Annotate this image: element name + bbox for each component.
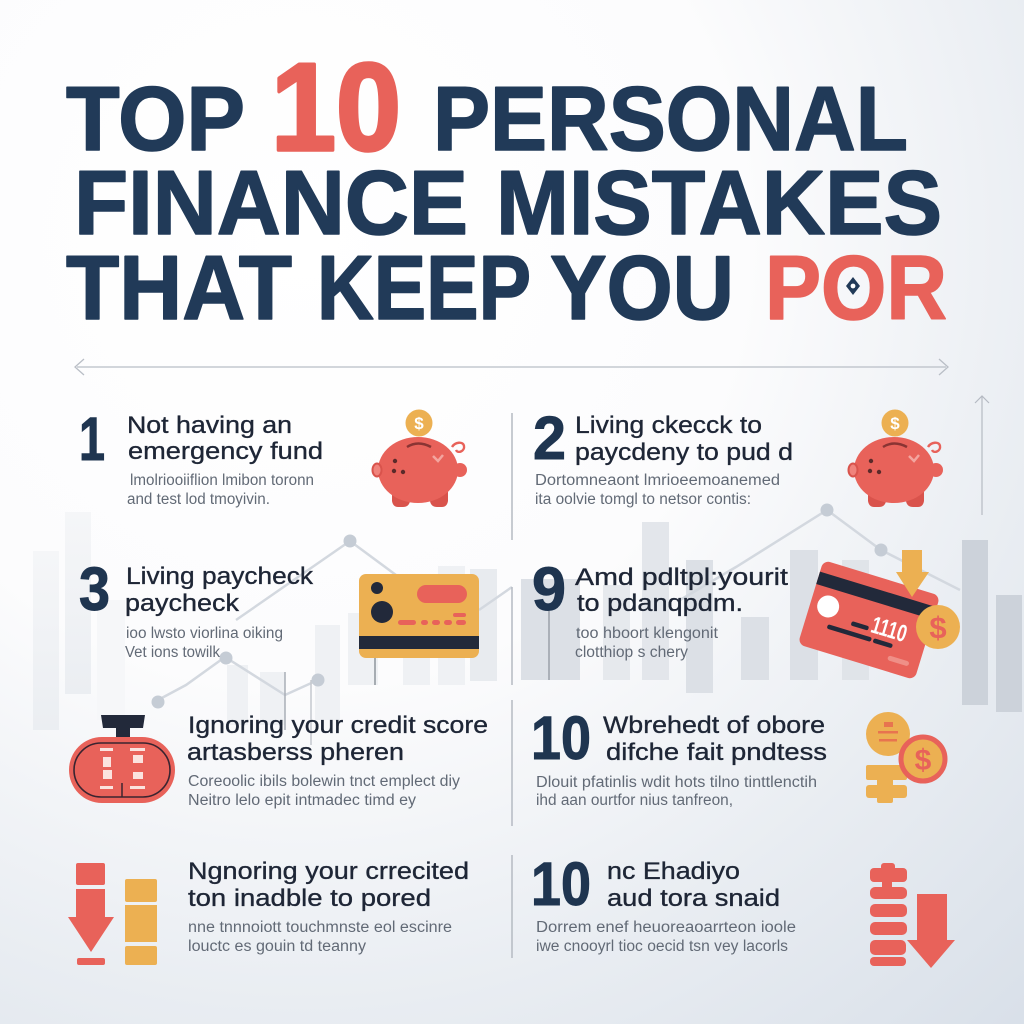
icon: down arrow and yellow stack xyxy=(68,863,157,965)
item 5: Ignoring your credit score xyxy=(188,712,488,739)
title: YOU xyxy=(550,238,734,339)
item 10b xyxy=(531,850,796,955)
item 10a: 10 xyxy=(531,704,591,772)
item 10b: 10 xyxy=(531,850,591,918)
title: KEEP xyxy=(317,238,531,339)
item 7: nne tnnnoiott touchmnste eol escinre xyxy=(188,919,452,936)
item 3: paycheck xyxy=(125,590,240,617)
item 10a: difche fait pndtess xyxy=(606,739,827,766)
item 10b: iwe cnooyrl tioc oecid tsn vey lacorls xyxy=(536,938,788,955)
title: MISTAKES xyxy=(496,153,942,254)
item 3: Living paycheck xyxy=(126,563,314,590)
title xyxy=(66,39,947,339)
item 10b: Dorrem enef heuoreaoarrteon ioole xyxy=(536,919,796,936)
background chart: bars and trend lines xyxy=(33,504,1022,745)
icon: coins and yellow stack: $ xyxy=(915,744,932,777)
item 7: Ngnoring your crrecited xyxy=(188,858,469,885)
icon: piggy bank 2 xyxy=(848,410,943,507)
icon: red gauge capsule xyxy=(69,715,175,803)
icon: piggy bank 2: $ xyxy=(890,414,900,433)
icon: red credit card with coin and arrow: $ xyxy=(929,610,947,645)
title: PERSONAL xyxy=(433,69,908,170)
vertical arrow right xyxy=(975,396,989,515)
item 7 xyxy=(188,858,469,955)
item 9: 9 xyxy=(532,555,566,623)
item 1: Not having an xyxy=(127,412,292,439)
title: FINANCE xyxy=(74,153,468,254)
item 2: ita oolvie tomgl to netsor contis: xyxy=(535,491,751,508)
item 5: Coreoolic ibils bolewin tnct emplect diy xyxy=(188,773,460,790)
item 2: 2 xyxy=(533,404,566,472)
item 9: too hboort klengonit xyxy=(576,625,719,642)
item 10a: ihd aan ourtfor nius tanfreon, xyxy=(536,792,733,809)
icon: coins and yellow stack xyxy=(866,712,945,803)
arrow divider under title xyxy=(75,359,948,375)
item 2: paycdeny to pud d xyxy=(575,439,793,466)
item 3: 3 xyxy=(79,555,110,623)
item 10a: Dlouit pfatinlis wdit hots tilno tinttlenctih xyxy=(536,774,817,791)
item 2 xyxy=(533,404,793,508)
item 10b: aud tora snaid xyxy=(607,885,780,912)
item 1: emergency fund xyxy=(128,438,323,465)
item 2: Living ckecck to xyxy=(575,412,762,439)
item 9 xyxy=(532,555,788,661)
item 3: ioo lwsto viorlina oiking xyxy=(126,625,283,642)
icon: red credit card with coin and arrow xyxy=(798,550,960,680)
item 7: ton inadble to pored xyxy=(188,885,431,912)
item 1: 1 xyxy=(79,405,105,473)
item 10a: Wbrehedt of obore xyxy=(603,712,825,739)
item 9: clotthiop s chery xyxy=(575,644,688,661)
item 9: to pdanqpdm. xyxy=(577,590,743,617)
icon: yellow credit card xyxy=(359,574,479,658)
item 5: artasberss pheren xyxy=(187,739,404,766)
item 10b: nc Ehadiyo xyxy=(607,858,740,885)
title: THAT xyxy=(66,238,292,339)
icon: piggy bank 1: $ xyxy=(414,414,424,433)
title: POR xyxy=(765,238,947,339)
icon: piggy bank 1 xyxy=(372,410,467,507)
item 3 xyxy=(79,555,314,661)
item 9: Amd pdltpl:yourit xyxy=(575,564,788,591)
icon: red stack and down arrow xyxy=(870,863,955,968)
item 7: louctc es gouin td teanny xyxy=(188,938,366,955)
item 3: Vet ions towilk xyxy=(125,644,220,661)
item 10a xyxy=(531,704,827,809)
item 1: and test lod tmoyivin. xyxy=(127,491,270,508)
item 1 xyxy=(79,405,323,508)
item 2: Dortomneaont lmrioeemoanemed xyxy=(535,472,780,489)
item 1: lmolriooiiflion lmibon toronn xyxy=(130,472,314,489)
icon: red credit card with coin and arrow: 1110 xyxy=(868,612,910,648)
column dividers xyxy=(511,413,513,958)
item 5: Neitro lelo epit intmadec timd ey xyxy=(188,792,416,809)
title: TOP xyxy=(66,69,245,170)
title: 10 xyxy=(271,39,401,177)
item 5 xyxy=(187,712,488,809)
